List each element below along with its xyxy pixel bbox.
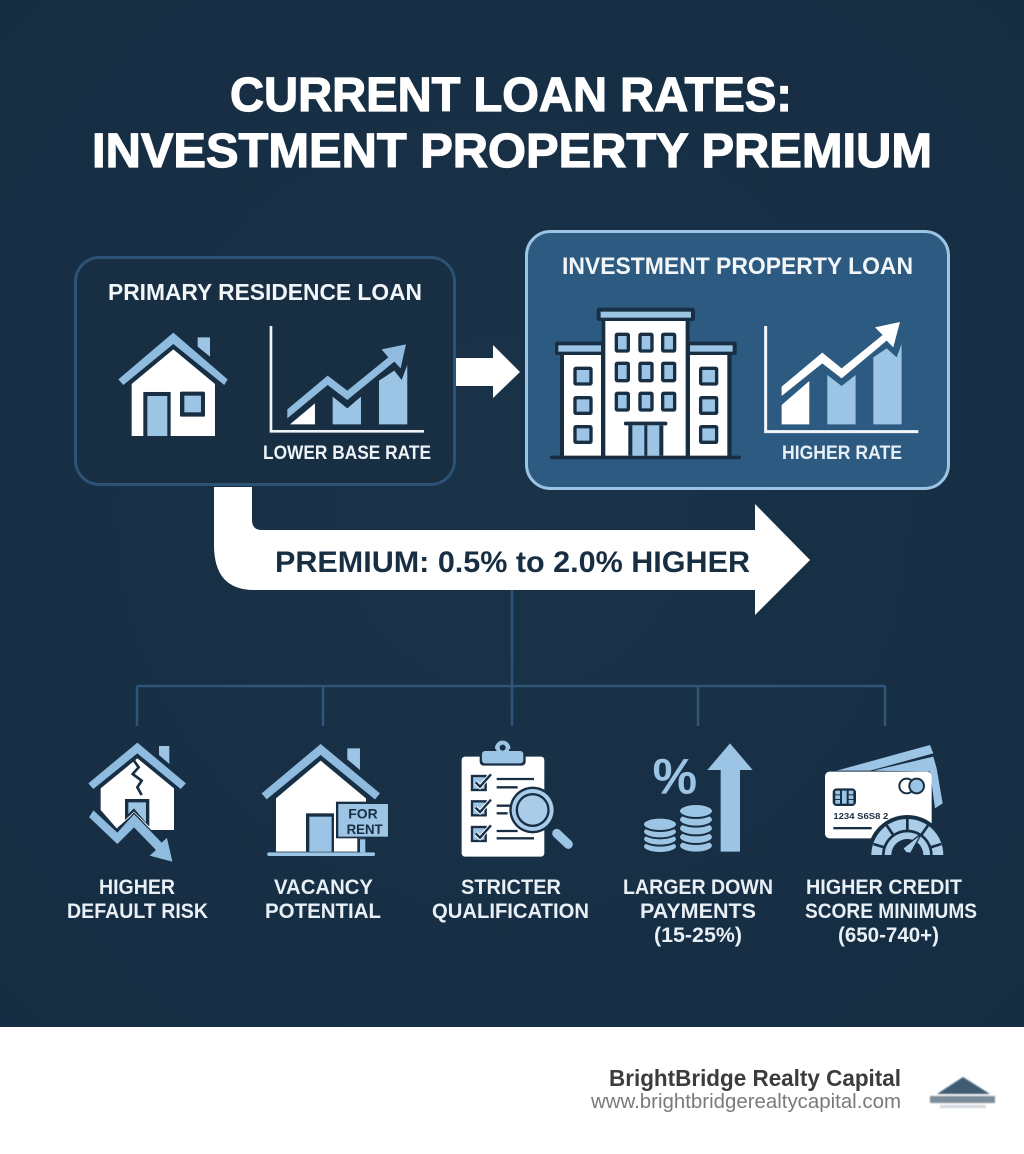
label: higher credit score minimums: HIGHER CREDIT	[806, 876, 962, 899]
label: larger down payments: LARGER DOWN	[623, 876, 773, 899]
label: higher credit score minimums: SCORE MINIMUMS	[805, 900, 977, 923]
label: larger down payments	[623, 876, 773, 947]
title: INVESTMENT PROPERTY PREMIUM	[92, 125, 932, 178]
label: vacancy potential: VACANCY	[274, 876, 373, 899]
icon: percent coins and up arrow: %	[653, 749, 697, 805]
company url: www.brightbridgerealtycapital.com	[590, 1091, 901, 1113]
icon: apartment building	[550, 308, 741, 459]
icon: house for rent	[262, 744, 390, 856]
icon: credit cards with score gauge: 1234 S6S8 2	[833, 812, 889, 821]
panel: primary residence loan	[76, 258, 454, 484]
label: stricter qualification	[432, 876, 589, 923]
label: stricter qualification: QUALIFICATION	[432, 900, 589, 923]
heading: primary residence loan: PRIMARY RESIDENCE LOAN	[108, 279, 422, 305]
label: lower base rate: LOWER BASE RATE	[263, 443, 431, 464]
title: CURRENT LOAN RATES:	[230, 69, 792, 122]
heading: investment property loan: INVESTMENT PROPERTY LOAN	[562, 253, 913, 280]
icon: cracked house with falling arrow	[88, 743, 186, 863]
label: higher default risk	[67, 876, 208, 923]
logo	[930, 1077, 995, 1108]
icon: credit cards with score gauge	[825, 745, 947, 855]
label: vacancy potential	[265, 876, 381, 923]
label: higher default risk: DEFAULT RISK	[67, 900, 208, 923]
label: higher credit score minimums	[805, 876, 977, 947]
icon: house for rent: RENT	[347, 821, 383, 837]
footer	[0, 1027, 1024, 1154]
icon: percent coins and up arrow	[643, 743, 753, 853]
label: larger down payments: PAYMENTS	[640, 900, 756, 923]
icon: house for rent: FOR	[348, 805, 378, 821]
title	[92, 69, 932, 178]
icon: house	[118, 333, 228, 436]
label: stricter qualification: STRICTER	[461, 876, 561, 899]
chart: higher rate	[766, 322, 918, 432]
label: larger down payments: (15-25%)	[654, 924, 742, 947]
label: vacancy potential: POTENTIAL	[265, 900, 381, 923]
panel: investment property loan	[526, 232, 948, 488]
arrow: premium callout	[214, 487, 810, 615]
chart: lower base rate	[271, 326, 424, 431]
label: higher rate: HIGHER RATE	[782, 443, 902, 464]
arrow: primary to investment	[456, 345, 520, 398]
company name: BrightBridge Realty Capital	[609, 1065, 901, 1091]
connector tree to risk factors	[137, 590, 885, 726]
icon: checklist with magnifier	[462, 741, 568, 857]
label: higher default risk: HIGHER	[99, 876, 175, 899]
premium text: PREMIUM: 0.5% to 2.0% HIGHER	[275, 546, 750, 579]
label: higher credit score minimums: (650-740+)	[838, 924, 939, 947]
